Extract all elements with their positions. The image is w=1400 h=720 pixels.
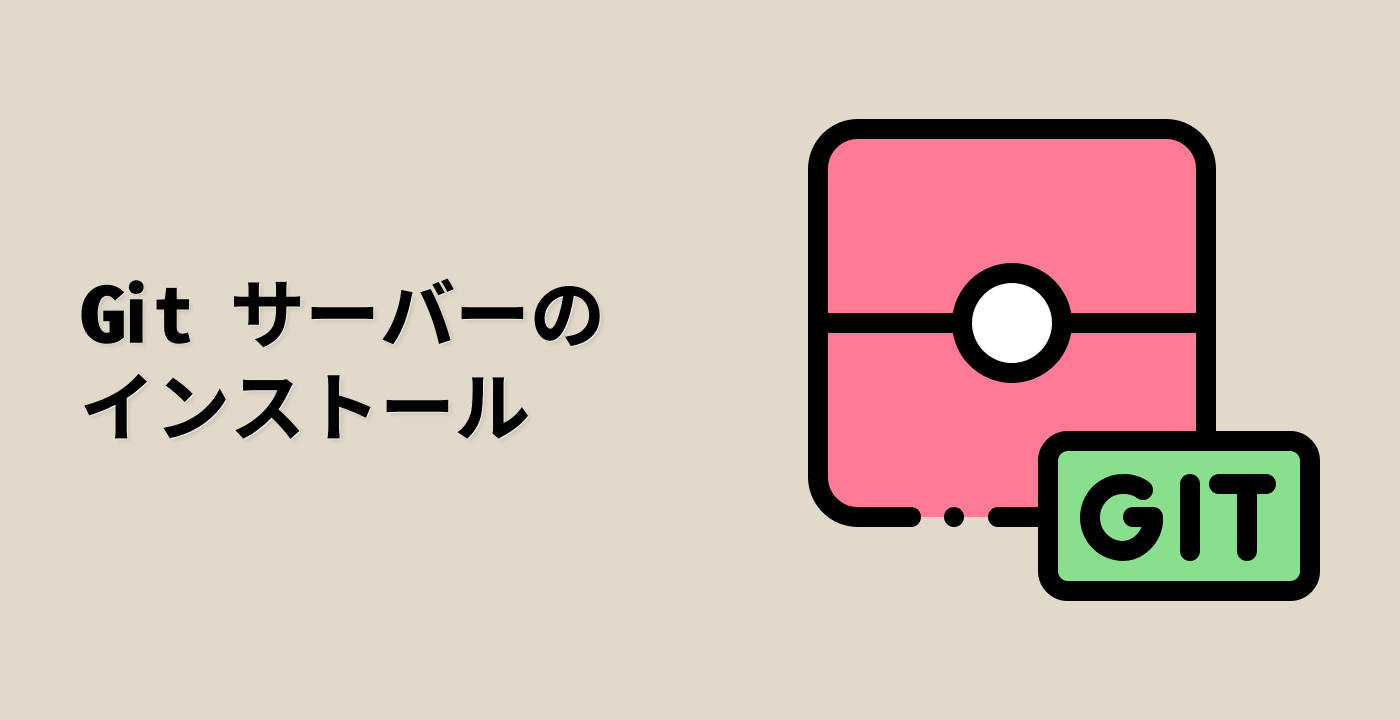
server box fill [818, 129, 1206, 517]
letter I [1180, 484, 1200, 551]
title: インストール [80, 348, 530, 456]
title: it サーバーの [118, 254, 605, 364]
divider line [818, 313, 1206, 333]
letter G [1090, 484, 1153, 551]
git badge [1048, 441, 1310, 591]
outline dot [944, 507, 964, 527]
letter T [1219, 484, 1266, 551]
server box outline [818, 129, 1206, 517]
centre circle [962, 273, 1062, 373]
title [80, 254, 605, 456]
title: G [80, 254, 126, 364]
